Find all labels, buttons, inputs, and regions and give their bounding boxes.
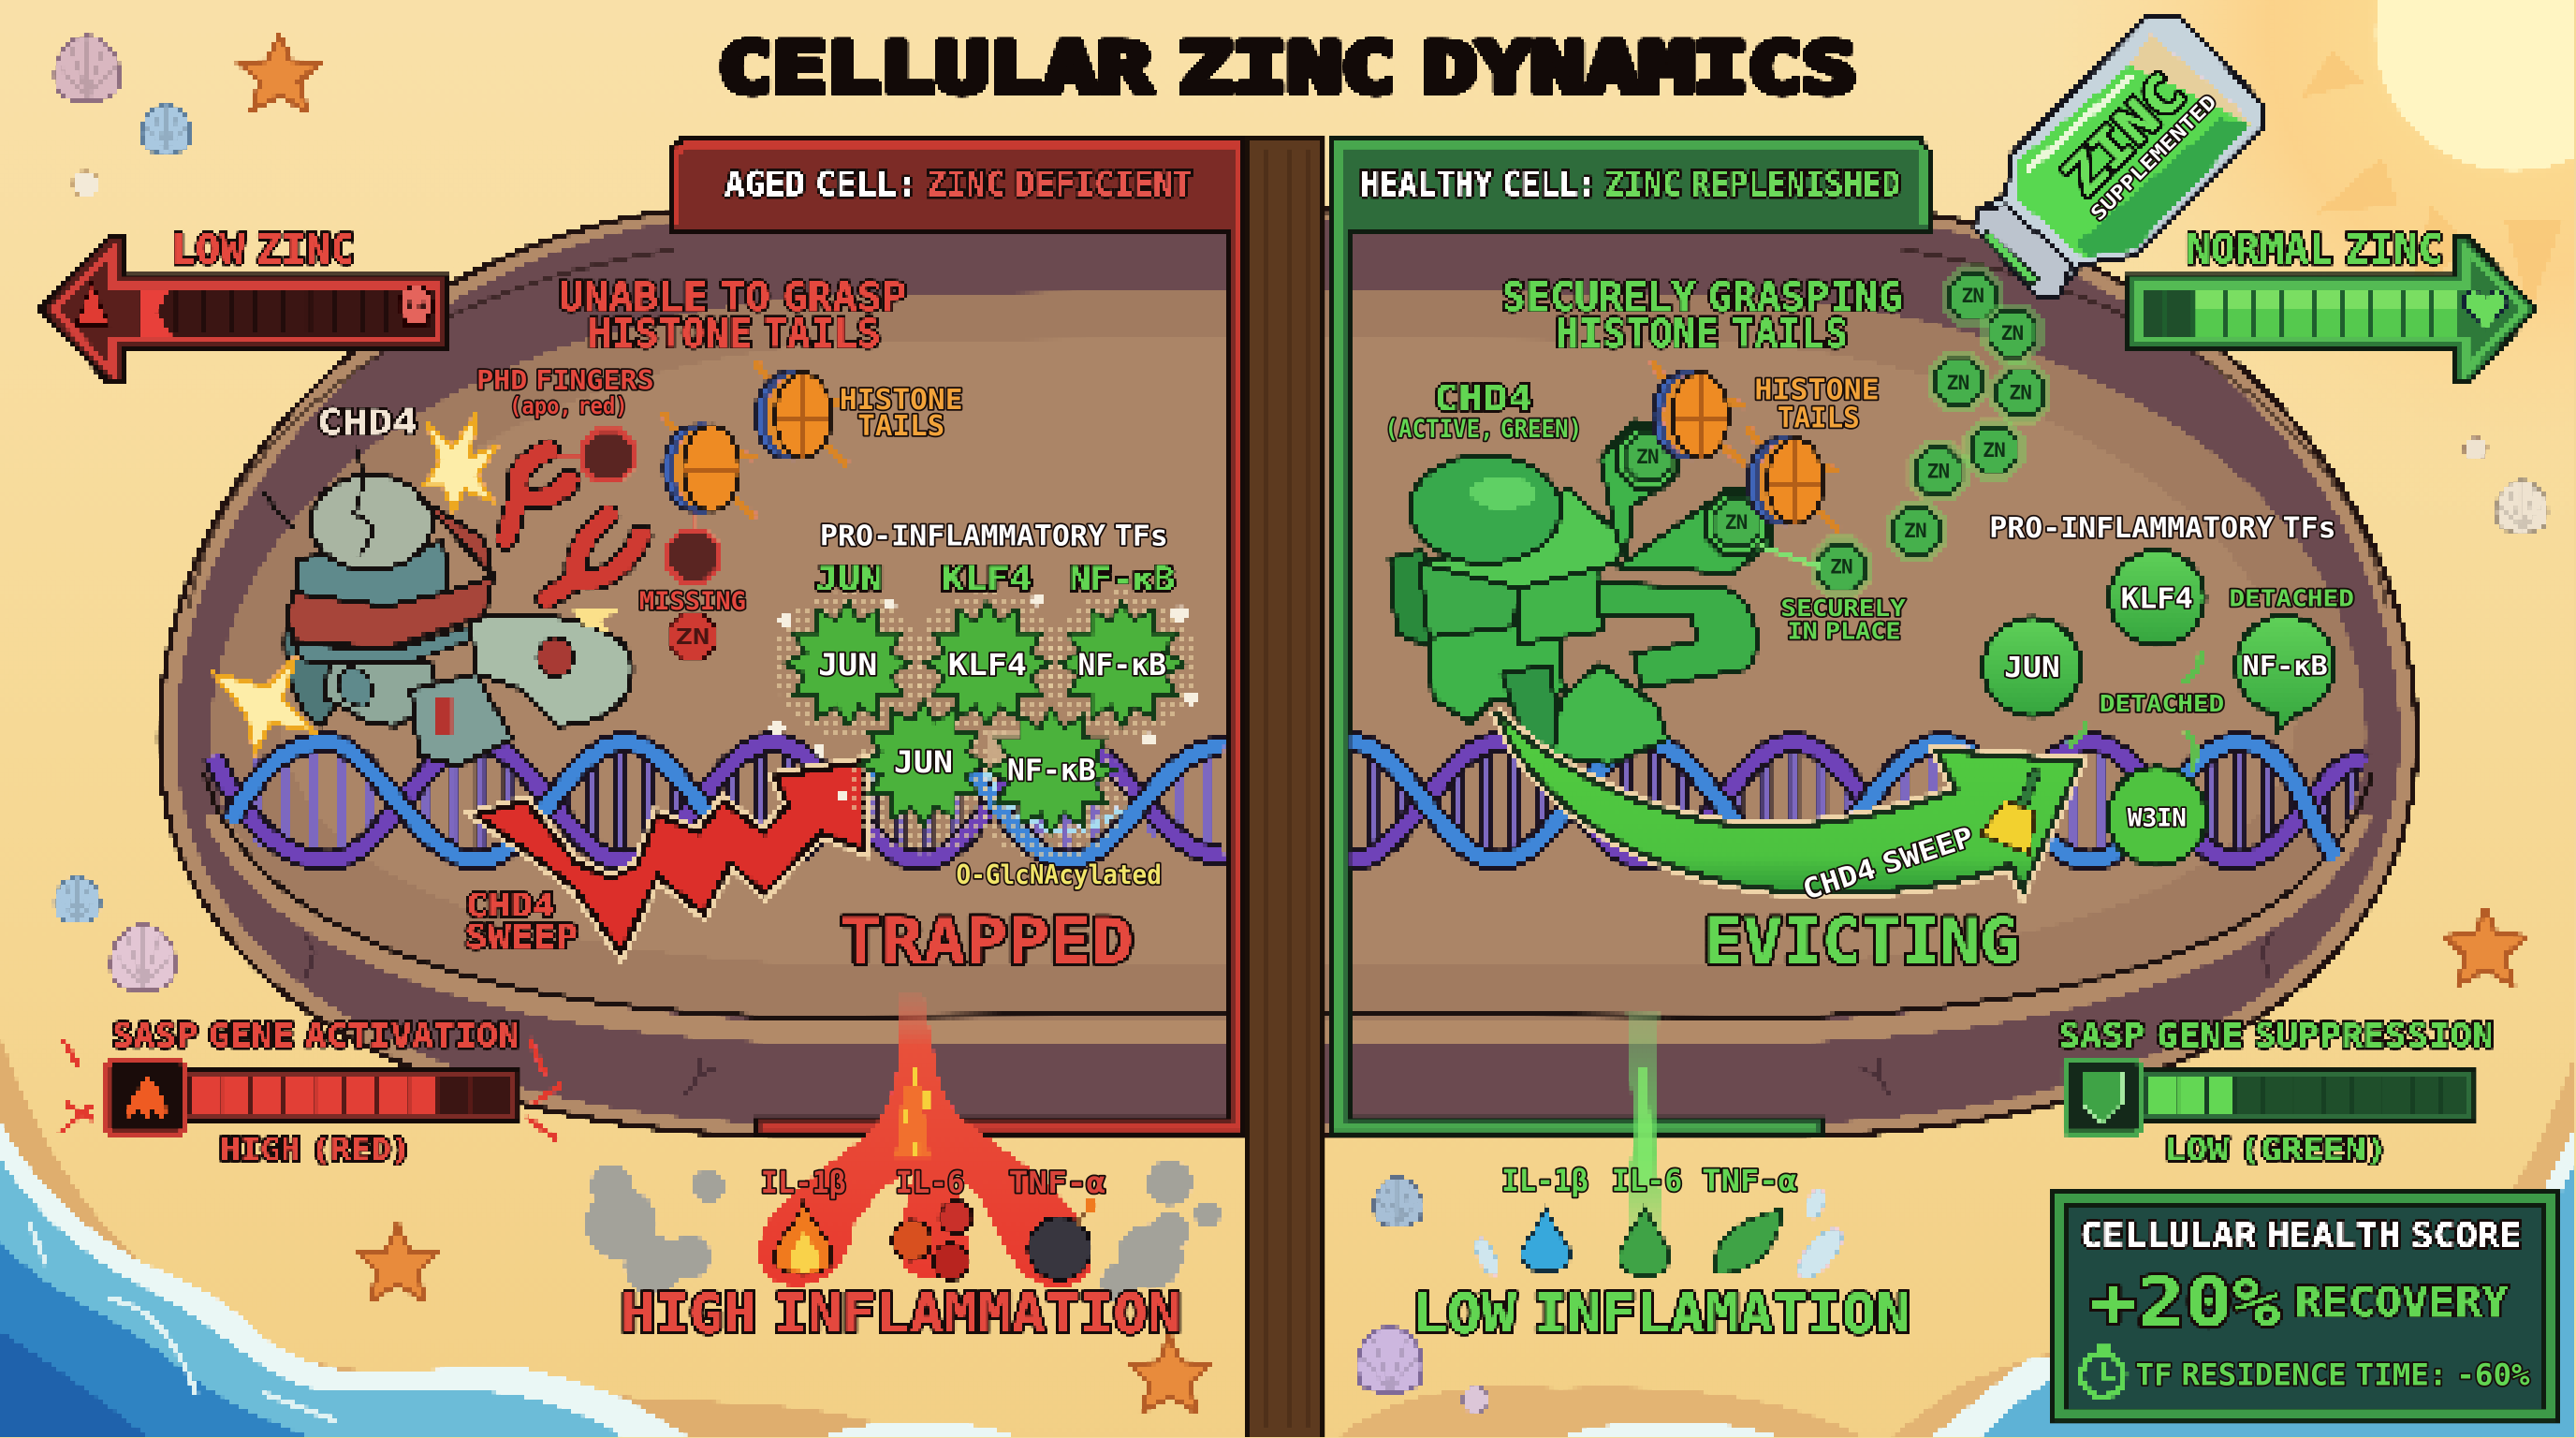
icon: flame marker (76, 283, 109, 325)
label: low green: LOW (GREEN) (2165, 1131, 2387, 1167)
SASP activation meter (59, 1038, 562, 1140)
label: IL-6 green: IL-6 (1612, 1165, 1682, 1198)
TF labels green: JUN (815, 560, 883, 598)
TF names on detached TFs: JUN (2004, 652, 2060, 684)
label: histone tails aged: HISTONE (840, 384, 963, 417)
label: SASP gene suppression: SASP GENE SUPPRESSION (2058, 1017, 2494, 1055)
icon: water drop (1521, 1208, 1571, 1272)
bottle label: supplemented: SUPPLEMENTED (2086, 90, 2221, 225)
label: high inflammation: HIGH INFLAMMATION (622, 1282, 1181, 1345)
icon: bomb (1029, 1199, 1097, 1280)
missing zinc label (639, 588, 746, 650)
label: histone tails healthy: HISTONE (1754, 374, 1880, 406)
finger upper with zinc (1600, 420, 1674, 559)
label: securely in place: IN PLACE (1787, 618, 1901, 645)
TF names on spiky TFs: KLF4 (948, 649, 1027, 682)
score recovery label: RECOVERY (2295, 1279, 2509, 1327)
TF names on spiky TFs: NF-κB (1007, 755, 1096, 788)
icon: spark top (424, 414, 496, 513)
label: histone tails aged (840, 384, 963, 443)
TF names on detached TFs: NF-κB (2243, 651, 2328, 682)
detached TF: KLF4 (2109, 550, 2204, 646)
score residence time: TF RESIDENCE TIME: -60% (2135, 1358, 2530, 1392)
icon: red claw upper (506, 450, 570, 539)
score heading: CELLULAR HEALTH SCORE (2080, 1215, 2522, 1255)
DNA: healthy cell (1351, 742, 2365, 861)
finger lower with zinc (1618, 492, 1773, 573)
label: O-GlcNAcylated: O-GlcNAcylated (957, 859, 1162, 890)
green beam (1626, 1010, 1662, 1249)
score value: +20% (2089, 1263, 2280, 1342)
SASP suppression meter (2065, 1062, 2476, 1134)
zinc ion labels: ZN (1927, 460, 1950, 483)
label: CHD4 active: CHD4 (1434, 378, 1532, 420)
normal zinc arrow gauge (2129, 238, 2537, 383)
panel: aged cell body (159, 211, 1288, 1137)
heading: securely grasping: HISTONE TAILS (1556, 310, 1848, 356)
header: healthy cell (1360, 164, 1901, 204)
green CHD4 sweep arrow (1497, 712, 2080, 893)
icon: leaf drop (1619, 1208, 1670, 1277)
TF labels green: NF-κB (1070, 560, 1175, 598)
lava eruption (759, 994, 1092, 1288)
icon: stopwatch (2082, 1345, 2124, 1397)
icon: spark left (213, 657, 313, 753)
header: healthy cell: HEALTHY CELL: (1360, 164, 1597, 204)
label: TNF-alpha red: TNF-α (1009, 1167, 1105, 1200)
icon: flame (128, 1075, 167, 1121)
heading: unable to grasp: HISTONE TAILS (588, 310, 881, 356)
DNA: aged cell (213, 724, 1224, 861)
label: CHD4 damaged: CHD4 (317, 402, 417, 442)
ocean: bottom left (0, 1035, 920, 1437)
icon: missing zinc (668, 613, 716, 660)
label: securely in place: SECURELY (1780, 594, 1906, 622)
icon: red claw lower (548, 516, 641, 598)
zinc ion labels: ZN (2001, 321, 2024, 345)
label: CHD4 sweep red: SWEEP (465, 918, 578, 957)
label: low zinc: LOW ZINC (171, 226, 355, 273)
panel frame: healthy cell (1332, 138, 1930, 1134)
TF names on spiky TFs: NF-κB (1077, 649, 1166, 682)
zinc ion labels: ZN (1983, 438, 2006, 462)
icon: molecule cluster (892, 1201, 973, 1280)
missing zinc label: MISSING (639, 588, 746, 616)
labels: detached (2100, 585, 2354, 717)
icon: broom (1981, 760, 2059, 854)
label: PHD fingers: (apo, red) (509, 392, 628, 419)
CHD4 active green protein (1390, 420, 1773, 764)
panel frame: aged cell (670, 138, 1244, 1134)
TF names on detached TFs (2004, 582, 2328, 833)
TF names on spiky TFs: JUN (818, 649, 877, 682)
label: high red: HIGH (RED) (220, 1131, 411, 1167)
label: IL-1beta red: IL-1β (761, 1167, 846, 1200)
labels: detached: DETACHED (2100, 690, 2224, 717)
zinc ion labels (1636, 284, 2032, 578)
red zigzag CHD4 sweep arrow (476, 762, 862, 953)
trapped TF cluster (769, 592, 1197, 861)
header: aged cell: AGED CELL: (724, 164, 916, 204)
zinc ion labels: ZN (1904, 519, 1927, 542)
label: IL-6 red: IL-6 (896, 1167, 964, 1200)
TF labels green: KLF4 (942, 560, 1032, 598)
splash droplets (1471, 1187, 1850, 1284)
TF labels green (815, 560, 1175, 598)
detached TF: NF-kB (2236, 616, 2334, 733)
label: pro-inflammatory TFs healthy: PRO-INFLAMMATORY TFs (1989, 512, 2336, 545)
icon: shield (2083, 1073, 2122, 1123)
label: CHD4 sweep red: CHD4 (465, 887, 555, 925)
panel: healthy cell body (1288, 211, 2417, 1137)
label: securely in place (1780, 594, 1906, 645)
label: histone tails aged: TAILS (857, 410, 944, 443)
low zinc arrow gauge (39, 238, 447, 383)
zinc ion labels: ZN (1725, 510, 1748, 534)
TF names on spiky TFs (818, 649, 1166, 788)
label: evicting: EVICTING (1704, 904, 2019, 977)
label: low inflammation: LOW INFLAMATION (1412, 1282, 1910, 1345)
header accent: zinc replenished: ZINC REPLENISHED (1605, 164, 1901, 204)
label: SASP gene activation: SASP GENE ACTIVATION (112, 1017, 520, 1055)
zinc ion labels: ZN (1961, 284, 1984, 307)
zinc ion labels: ZN (1636, 445, 1660, 468)
zinc ion labels: ZN (2009, 380, 2032, 404)
label: pro-inflammatory TFs aged: PRO-INFLAMMATORY TFs (820, 521, 1168, 553)
heading: securely grasping: SECURELY GRASPING (1501, 274, 1902, 320)
label: CHD4 sweep white: CHD4 SWEEP (1799, 821, 1978, 907)
labels: detached: DETACHED (2230, 585, 2354, 612)
icon: skull (400, 286, 432, 325)
label: TNF-alpha green: TNF-α (1702, 1165, 1797, 1198)
heading: unable to grasp (559, 274, 907, 356)
ocean: bottom right (822, 1051, 2576, 1437)
header accent: zinc deficient: ZINC DEFICIENT (927, 164, 1193, 204)
empty PHD octagons (555, 431, 720, 581)
smoke (585, 1160, 1221, 1303)
title: CELLULAR ZINC DYNAMICS (718, 29, 1856, 109)
histones: aged cell (664, 360, 848, 518)
label: histone tails healthy (1754, 374, 1880, 434)
center divider: wooden post (1247, 138, 1325, 1438)
label: CHD4 sweep red (465, 887, 578, 957)
falling zinc ions (1758, 265, 2052, 598)
label: PHD fingers: PHD FINGERS (476, 365, 654, 396)
label: normal zinc: NORMAL ZINC (2187, 226, 2443, 273)
icon: heart (2464, 291, 2507, 330)
label: IL-1beta green: IL-1β (1501, 1165, 1588, 1198)
heading: securely grasping (1501, 274, 1902, 356)
label: trapped: TRAPPED (840, 904, 1134, 977)
bottle: zinc supplemented (1975, 17, 2262, 299)
zinc symbol: ZN (675, 625, 710, 650)
histones: healthy cell (1653, 360, 1840, 531)
panel: cellular health score (2054, 1191, 2556, 1423)
detached TF: JUN (1983, 618, 2082, 716)
TF names on spiky TFs: JUN (894, 746, 953, 780)
icon: spark right (572, 608, 624, 633)
header: aged cell (724, 164, 1193, 204)
icon: fire (774, 1203, 832, 1274)
bottle label: zinc: ZINC (2052, 63, 2197, 208)
TF names on detached TFs: W3IN (2128, 805, 2187, 833)
label: PHD fingers (476, 365, 654, 419)
icon: leaf (1716, 1210, 1782, 1273)
TF names on detached TFs: KLF4 (2121, 582, 2193, 615)
CHD4 damaged protein (213, 414, 641, 766)
zinc ion labels: ZN (1830, 554, 1853, 578)
detachment wisps (2067, 649, 2202, 772)
heading: unable to grasp: UNABLE TO GRASP (559, 274, 907, 320)
label: histone tails healthy: TAILS (1778, 402, 1860, 434)
label: active green: (ACTIVE, GREEN) (1385, 416, 1582, 444)
detached TF on DNA (2108, 768, 2206, 866)
zinc ion labels: ZN (1947, 371, 1969, 394)
sun (2021, 0, 2576, 526)
